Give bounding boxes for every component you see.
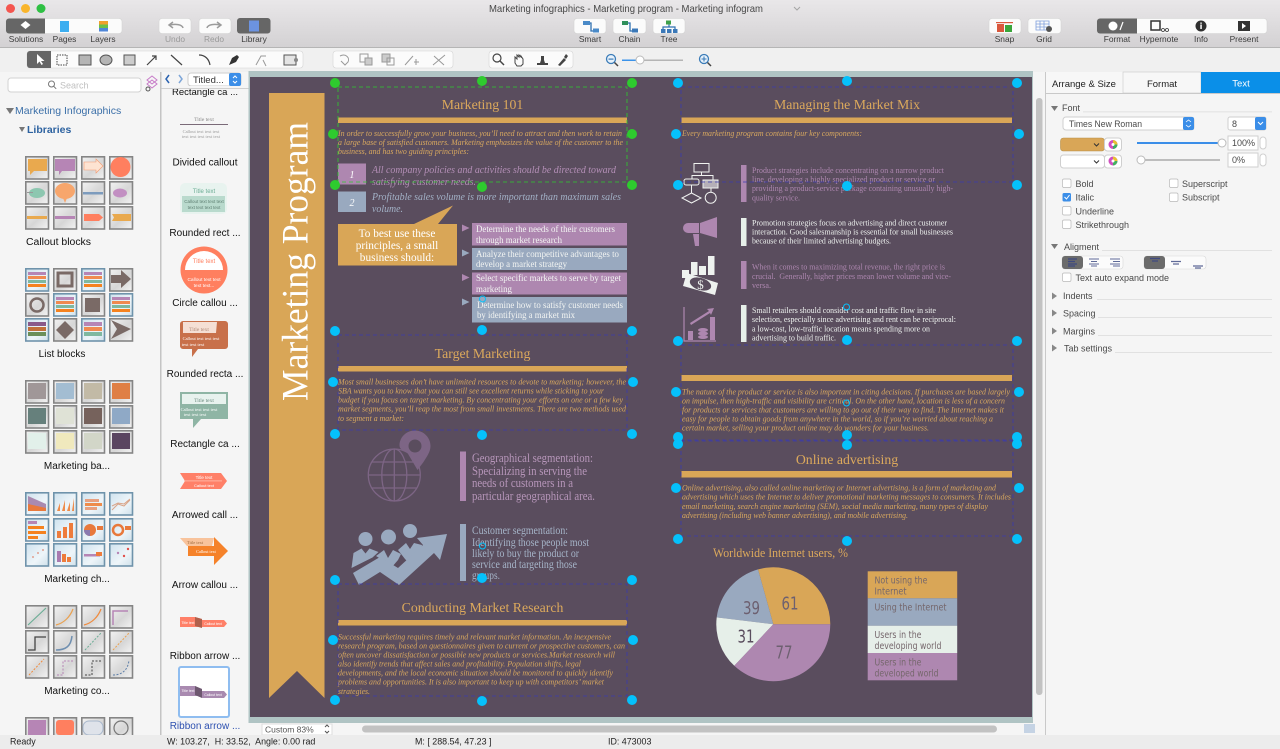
geographical segmentation: particular geographical area. [472,489,595,503]
heading: target marketing: Target Marketing [435,346,530,361]
canvas backdrop [248,72,1045,735]
online advertising text: advertising (including web banner advertising), and mobile advertising. [682,510,908,520]
list item 2: develop a market strategy [476,260,567,270]
shape: rectangle callout green: Rectangle ca ... [170,439,240,450]
library: marketing backgrounds: Marketing ba... [44,461,110,472]
right panel: text style checkboxes: Underline [1076,206,1114,216]
target marketing text: market segments, you’ll reap the most from small investments. There are two methods used [338,404,627,414]
status bar [0,735,1280,749]
pie chart legend: Using the Internet [874,602,947,614]
library: marketing connectors [26,606,132,697]
canvas scrollbars: Custom 83% [265,724,314,734]
canvas scrollbars [248,72,1045,735]
promotion strategies text [741,218,954,246]
shape: circle callout: Title text [193,259,216,265]
pie chart: 39 [743,599,760,619]
research text: research program, based on questionnaires given to current or prospective customers, can [338,640,626,650]
right panel: text style checkboxes: Strikethrough [1076,220,1129,230]
shape: rounded rectangle callout: text text text text [188,205,221,210]
research text [337,632,626,696]
shape: rounded rectangle callout: Title text [193,189,216,195]
shape: rectangle callout green: Title text [194,398,214,404]
list item 4 [462,297,627,322]
infographic page background [250,77,1032,717]
shape: arrow callout: Title text [187,540,204,545]
callout: business should: [360,252,434,264]
library: marketing backgrounds [26,381,132,472]
promotion strategies text: interaction. Good salesmanship is essential for small businesses [752,226,954,236]
right panel: font settings: 0% [1232,155,1245,165]
shape: circle callout: Callout text text [187,277,221,283]
nature of product text: easy for people to obtain goods from anywhere in the world, so if you’re worried about reaching a [682,414,994,424]
promotion strategies text: because of their limited advertising budgets. [752,236,891,246]
right panel: tabs: Arrange & Size [1052,79,1116,90]
ribbon title: Marketing Program [276,122,316,401]
right panel: collapsed sections: Indents [1063,291,1093,301]
left panel: libraries header: Libraries [27,124,72,136]
section: target marketing [337,346,627,585]
principle 1: All company policies and activities should be directed toward [371,165,617,176]
shape: rounded rectangle callout brown [167,321,243,380]
right panel: font settings: 8 [1232,119,1237,129]
toolbar: snap grid and format group: Grid [1036,34,1052,44]
status bar: M: [ 288.54, 47.23 ] [415,736,491,746]
product strategies text: Product strategies include concentrating on a narrow product [752,165,944,175]
section: product and service nature [682,375,1012,432]
toolbar: smart chain tree: Chain [619,34,641,44]
shape: selected ribbon arrow [170,667,240,732]
right panel: alignment [1051,242,1272,283]
shape: rounded rectangle callout brown: Callout text text text [183,336,220,341]
drawing tools toolbar [27,51,303,68]
online advertising text: email marketing, search engine marketing (SEM), social media marketing, many types of display [682,501,988,511]
list item 1: Determine the needs of their customers [476,224,615,235]
research text: also identify trends that affect sales and profitability. Population shifts, legal [338,658,581,668]
second panel: shape list: Rectangle ca ... [172,87,238,98]
toolbar: solutions pages layers [6,18,122,44]
pie chart title: Worldwide Internet users, % [713,546,848,560]
shape: circle callout: Circle callou ... [172,298,238,309]
toolbar: solutions pages layers: Solutions [9,34,43,44]
icon: globe with pin [368,430,430,501]
right panel: text style checkboxes: Subscript [1182,192,1220,202]
shape: arrow callout: Arrow callou ... [172,580,238,591]
online advertising text: advertising which uses the Internet to deliver promotional marketing messages to consumers. It includes [682,492,1012,502]
heading: online advertising: Online advertising [796,452,898,467]
shape: arrow callout [172,537,238,591]
pie chart legend: Internet [874,586,907,598]
customer segmentation: likely to buy the product or [472,548,579,560]
toolbar: snap grid and format group: Format [1104,34,1131,44]
left panel: libraries header: Marketing Infographics [15,105,121,117]
section: conducting market research [337,600,627,696]
price text: crucial. Generally, higher prices mean lower volume and vice- [752,271,951,281]
principle 2: 2 [350,198,354,209]
site selection text: a low-cost, low-traffic location means spending more on [752,324,931,334]
right panel: collapsed sections [1052,291,1272,354]
icon: money and bars: $ [697,277,704,292]
shape: circle callout: text text... [194,283,214,289]
principle 1 [338,164,617,188]
shape: arrowed callout: Callout text [194,483,215,488]
shape: rounded rectangle callout: Callout text text text [184,199,225,204]
right panel: text style checkboxes: Bold [1076,179,1094,189]
heading: conducting market research: Conducting Market Research [402,600,563,615]
nature of product text [682,386,1010,432]
title bar and main toolbar: Marketing infographics - Marketing program - Marketing infogram [489,4,763,15]
research text: problems and opportunities. It is also important to keep up with competitors’ market [337,676,604,686]
customer segmentation: service and targeting those [472,559,577,571]
principle 1: satisfying customer needs. [372,177,476,188]
nature of product text: The nature of the product or service is also important in citing decisions. If purchases are based largely [682,386,1010,396]
view tools toolbar [489,51,573,68]
right panel: tabs [1045,72,1280,735]
icon: money and bars [682,256,718,295]
shape: ribbon arrow: Ribbon arrow ... [170,651,240,662]
geographical segmentation [460,451,595,503]
product strategies text: quality service. [752,192,800,202]
list item 2: Analyze their competitive advantages to [476,250,619,260]
title bar and main toolbar [0,0,1280,72]
target marketing text [337,376,627,423]
left panel: libraries header [0,72,160,735]
shape: divided callout: text text text text text [182,134,221,139]
section: managing the market mix [681,97,1012,342]
toolbar: smart chain tree: Smart [579,34,602,44]
nature of product text: for products or services that customers are willing to go out of their way to find. The Internet makes it [682,404,1004,414]
principle 2: volume. [372,204,403,215]
principle 2: Profitable sales volume is more important than maximum sales [371,192,621,203]
shape: arrow callout: Callout text [196,549,217,554]
pie chart legend: Not using the [874,576,928,586]
site selection text: selection, especially since advertising and rent can be reciprocal: [752,314,956,324]
heading: managing the market mix: Managing the Market Mix [774,97,920,112]
toolbar: undo redo library: Undo [165,34,185,44]
price text: versa. [752,280,771,290]
right panel: tabs: Format [1147,79,1177,90]
section: online advertising [682,452,1012,520]
shape: selected ribbon arrow: Title text [181,689,195,693]
online advertising text [682,482,1012,520]
icon: flowchart [682,164,718,203]
right panel: collapsed sections: Tab settings [1064,344,1113,354]
icon: growth chart with coins [684,307,716,341]
list item 1 [462,223,627,246]
principle 1: 1 [350,170,354,181]
price text [741,261,951,290]
right panel: text style checkboxes: Superscript [1182,179,1228,189]
product strategies text [741,165,953,202]
right panel: collapsed sections: Margins [1063,326,1096,336]
customer segmentation: Customer segmentation: [472,525,568,537]
shape: rounded rectangle callout [169,183,241,239]
principle 2 [338,192,621,215]
shape: rectangle callout green: Callout text text text [181,407,218,412]
ribbon title [269,93,324,698]
status bar: ID: 473003 [608,736,651,746]
callout: principles, a small [356,240,438,252]
shape: arrowed callout: Title text [196,475,213,480]
toolbar: smart chain tree: Tree [661,34,678,44]
pie chart legend [868,571,957,680]
shape: rectangle callout green [170,392,240,450]
research text: often uncover dissatisfaction or possible new products or services.Market research will [338,650,615,660]
second panel: shape list [160,72,248,735]
product strategies text: line, developing a highly specialized product or service or [752,174,935,184]
library: callout blocks [26,157,132,248]
list item 2 [462,248,627,270]
callout: To best use these [359,228,435,240]
shape: divided callout: Callout text text text [183,129,220,134]
toolbar: undo redo library [159,18,270,44]
shape: ribbon arrow: Title text [181,621,195,625]
pie chart: 61 [782,594,798,614]
library: marketing charts [26,493,132,585]
product strategies text: providing a product-service package containing unusually high- [752,183,953,193]
promotion strategies text: Promotion strategies focus on advertising and direct customer [752,218,947,228]
nature of product text: on impulse, then high-traffic and visibility are critical. On the other hand, location is less of a concern [682,396,1006,406]
target marketing text: budget if you focus on target marketing. By concentrating your efforts on one or a few key [338,394,623,404]
toolbar: snap grid and format group: Info [1194,34,1208,44]
toolbar: smart chain tree [574,18,685,44]
shape: selected ribbon arrow: Ribbon arrow ... [170,721,240,732]
right panel: font settings [1051,103,1272,168]
research text: strategies. [338,686,370,696]
section: marketing 101 [337,97,627,322]
intro text: a large base of satisfied customers. Marketing emphasizes the value of the customer to the [338,137,623,147]
customer segmentation [460,524,590,582]
toolbar: solutions pages layers: Pages [53,34,76,44]
right panel: collapsed sections: Spacing [1063,308,1096,318]
geographical segmentation: Specializing in serving the [472,464,587,478]
left panel: libraries header: Search [60,80,89,90]
customer segmentation: groups. [472,570,500,582]
site selection text [741,305,956,342]
geographical segmentation: Geographical segmentation: [472,451,593,465]
right panel: tabs: Text [1232,78,1250,90]
shape: rounded rectangle callout brown: Rounded recta ... [167,369,243,380]
library: next group partially visible [26,718,132,740]
shape: rectangle callout green: text text text [184,412,207,417]
heading: marketing 101: Marketing 101 [442,97,523,112]
library: marketing charts: Marketing ch... [44,574,110,585]
callout [338,206,457,266]
right panel: font settings: Times New Roman [1069,119,1142,129]
right panel: font settings: Font [1062,103,1081,113]
price text: When it comes to maximizing total revenue, the right price is [752,262,946,272]
icon: megaphone [683,217,717,246]
shape: arrowed callout: Arrowed call ... [172,510,238,521]
toolbar: snap grid and format group: Snap [995,34,1015,44]
research text: Successful marketing requires timely and relevant market information. An inexpensive [338,632,611,642]
shape: selected ribbon arrow: Callout text [204,693,222,697]
nature of product text: certain market, selling your product online may do wonders for your business. [682,422,929,432]
list item 4: by identifying a market mix [477,310,575,321]
shape: ribbon arrow: Callout text [204,622,222,626]
shape: rounded rectangle callout brown: text text text [182,342,205,347]
toolbar: solutions pages layers: Layers [90,34,116,44]
market mix intro: Every marketing program contains four key components: [681,128,862,138]
library: callout blocks: Callout blocks [26,237,91,248]
target marketing text: to segment a market: [338,413,404,423]
library: marketing connectors: Marketing co... [44,686,110,697]
shape: divided callout: Title text [194,117,214,123]
right panel: text style checkboxes: Italic [1076,192,1095,202]
research text: developments, and the local economic situation should be monitored to quickly identify [338,668,613,678]
status bar: W: 103.27, H: 33.52, Angle: 0.00 rad [167,736,315,746]
selection outlines and handles [328,76,1024,706]
right panel: font settings: 100% [1232,138,1255,148]
site selection text: advertising to build traffic. [752,332,836,342]
toolbar: undo redo library: Library [241,34,268,44]
zoom slider [606,54,711,66]
list item 3 [462,272,627,295]
shape: circle callout [172,246,238,309]
site selection text: Small retailers should consider cost and traffic flow in site [752,305,936,315]
target marketing text: SBA wants you to know that you can still see excellent returns while sticking to your [338,386,605,396]
status bar: Ready [10,736,36,746]
list item 1: through market research [476,236,562,246]
intro text [337,128,623,156]
customer segmentation: Identifying those people most [472,537,590,549]
pie chart: 77 [776,644,792,664]
target marketing text: Most small businesses don’t have unlimited resources to devote to marketing; however, the [337,376,626,386]
toolbar: snap grid and format group: Present [1230,34,1259,44]
right panel: text style checkboxes [1062,179,1228,230]
list item 3: Select specific markets to serve by target [476,273,621,284]
pie chart legend: developed world [874,668,939,680]
intro text: In order to successfully grow your business, you’ll need to attract and then work to retain [337,128,623,138]
library: list blocks: List blocks [39,349,85,360]
icon: team with growth arrow [352,524,447,585]
pie chart: 31 [738,628,754,648]
list item 3: marketing [476,285,512,295]
shape: rounded rectangle callout brown: Title text [189,327,209,333]
list item 4: Determine how to satisfy customer needs [477,300,623,311]
right panel: alignment: Aligment [1064,242,1100,252]
pie chart legend: Users in the [874,658,922,668]
pie chart legend: developing world [874,641,942,652]
intro text: business, and has two guiding principles: [338,146,469,156]
edit tools toolbar [333,51,453,68]
shape: divided callout [172,117,238,168]
pie chart legend: Users in the [874,630,922,641]
online advertising text: Online advertising, also called online marketing or Internet advertising, is a form of marketing and [682,482,997,492]
shape: arrowed callout [172,473,238,521]
toolbar: snap grid and format group [989,18,1267,44]
shape: rounded rectangle callout: Rounded rect ... [169,228,241,239]
toolbar: undo redo library: Redo [204,34,224,44]
geographical segmentation: needs of customers in a [472,476,573,490]
right panel: alignment: Text auto expand mode [1076,273,1169,283]
pie chart [716,567,830,681]
shape: divided callout: Divided callout [172,158,238,168]
shape: ribbon arrow [170,617,240,662]
library: list blocks [26,269,132,360]
second panel: shape list: Titled... [193,75,224,86]
toolbar: snap grid and format group: Hypernote [1140,34,1179,44]
